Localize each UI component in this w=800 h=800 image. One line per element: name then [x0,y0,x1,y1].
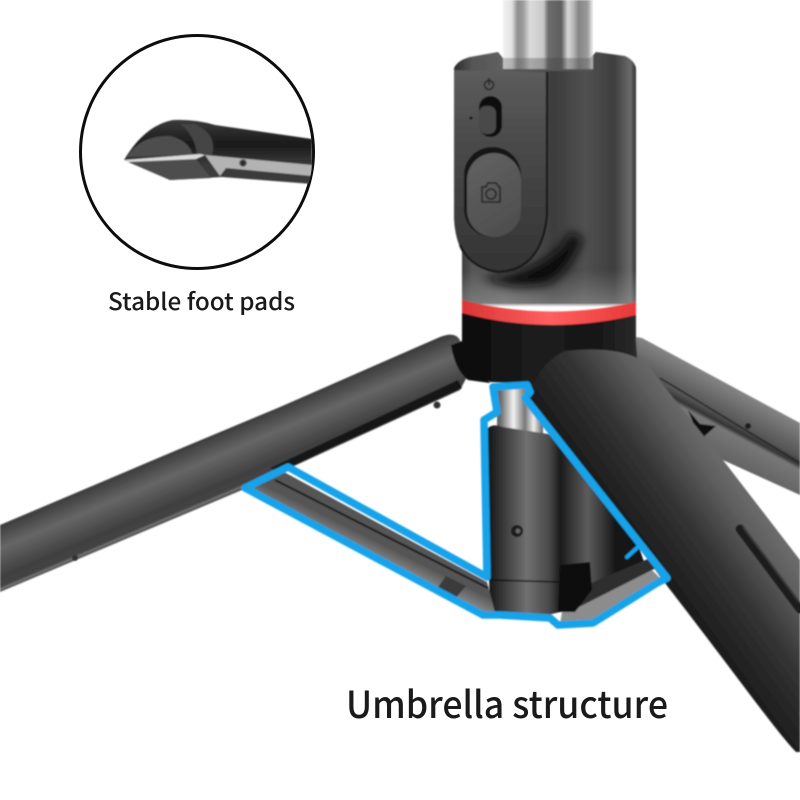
inset: foot pad detail [80,36,314,268]
collar on top [503,54,593,70]
caption: umbrella structure: Umbrella structure [346,675,668,729]
telescopic silver pole [503,0,593,72]
inner silver shaft [497,388,543,438]
shadow under panel [482,232,583,287]
left strut [248,472,495,613]
leg slot [740,529,800,609]
power icon [484,80,494,90]
front tripod leg [527,340,800,752]
slide switch [479,96,502,137]
red ring [462,300,636,325]
left tripod leg [0,335,468,592]
right strut [560,568,662,624]
caption: stable foot pads: Stable foot pads [108,283,295,317]
sleeve screw [511,525,523,537]
inset circle [80,36,314,268]
control panel [454,70,547,272]
black base [462,304,637,384]
umbrella structure inner parts [248,388,662,624]
shutter button [464,147,521,237]
foot pad [124,120,312,184]
camera icon [482,183,500,202]
lower head highlight [462,270,636,306]
indicator dot [470,116,472,120]
rear cylinder [555,425,650,610]
central sleeve [485,425,560,618]
blue outline [245,385,667,625]
rear right leg [625,335,800,495]
left leg hinge [451,340,490,383]
head unit [454,52,636,306]
